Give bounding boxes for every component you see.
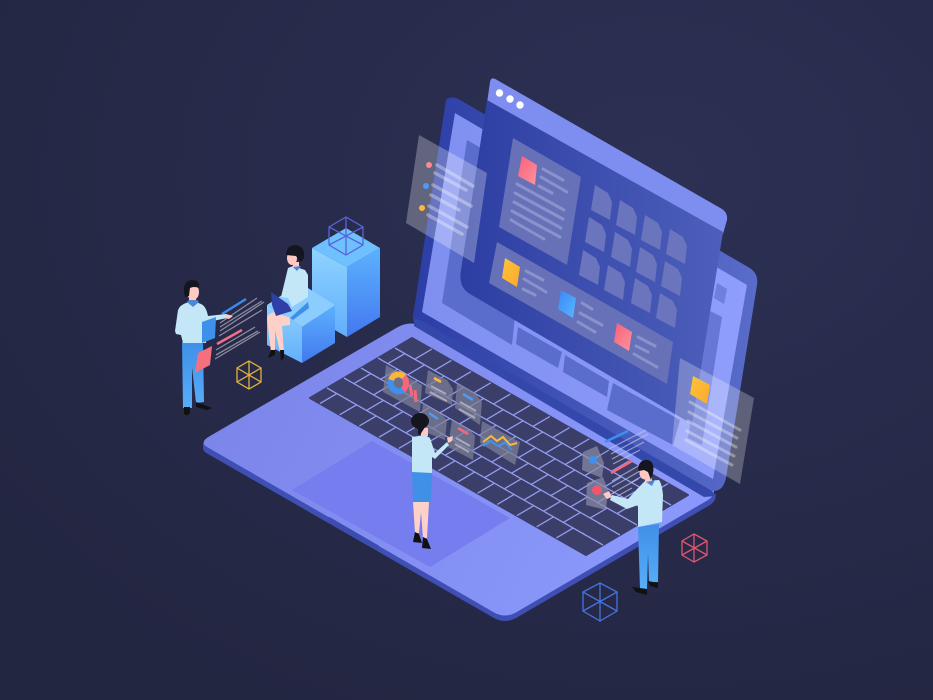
transparent panel: left xyxy=(406,135,487,263)
tile: red xyxy=(518,156,537,185)
wireframe cube: blue xyxy=(583,583,617,621)
panel text lines xyxy=(511,169,657,367)
person: man left xyxy=(175,280,233,415)
tall blue box xyxy=(312,228,380,337)
floating documents right xyxy=(582,430,648,510)
back window panels xyxy=(442,140,530,345)
person: seated woman xyxy=(267,245,309,361)
wide keys xyxy=(565,513,618,544)
person: man right xyxy=(603,460,663,595)
touchpad xyxy=(292,441,510,567)
laptop lid xyxy=(413,98,757,497)
hinge band xyxy=(414,318,716,497)
line chart xyxy=(483,436,517,445)
floating documents on keyboard xyxy=(383,365,520,465)
front notch xyxy=(328,519,378,548)
donut chart xyxy=(391,374,406,391)
wireframe cube: yellow xyxy=(237,361,261,389)
laptop base xyxy=(203,324,716,621)
tile: blue xyxy=(558,290,576,318)
document grid xyxy=(579,185,687,328)
wireframe cube: purple xyxy=(329,217,363,255)
transparent panel: right xyxy=(672,358,754,484)
text lines near left man xyxy=(215,298,264,359)
window dots xyxy=(496,89,524,109)
screen xyxy=(422,113,747,479)
seat box xyxy=(267,283,335,363)
bottom panel xyxy=(489,242,673,384)
tile: yellow xyxy=(502,258,520,287)
tile: red xyxy=(614,323,632,351)
wireframe cube: red xyxy=(682,534,707,562)
person: standing woman xyxy=(411,413,453,549)
keyboard xyxy=(310,338,688,555)
browser window xyxy=(460,78,727,424)
text panel xyxy=(499,138,581,265)
